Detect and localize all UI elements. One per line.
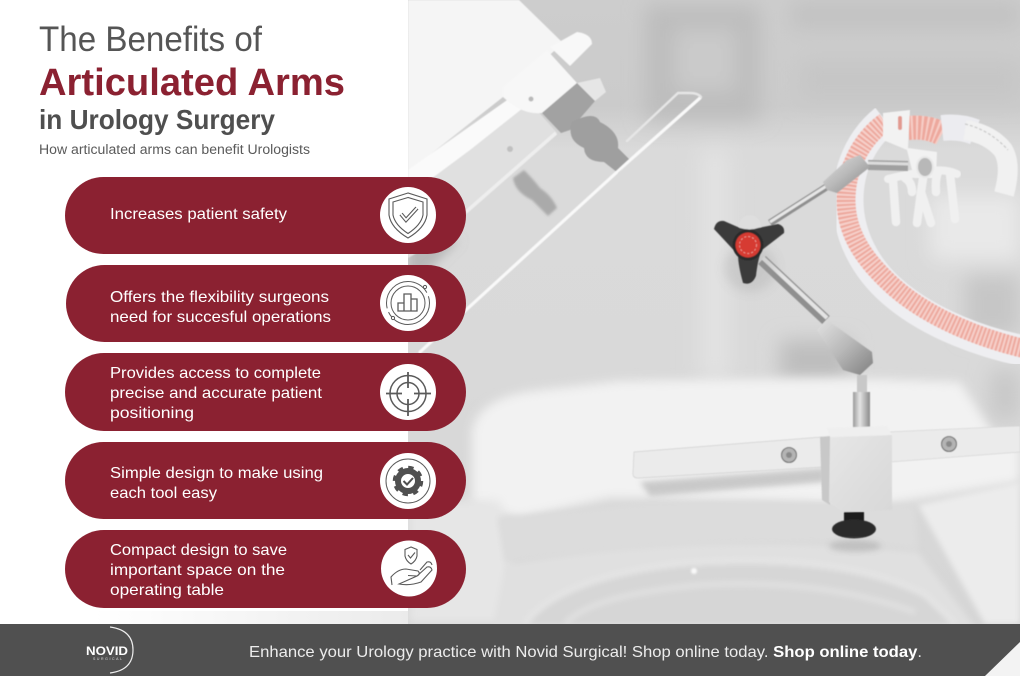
corner triangle <box>985 642 1020 676</box>
benefit pill: positioning: Provides access to complete <box>110 365 321 382</box>
benefit pill: compact design: Compact design to save <box>110 542 287 559</box>
benefit pill: simple design: Simple design to make using <box>110 465 323 482</box>
title <box>39 20 345 135</box>
white wire frame <box>420 93 701 352</box>
benefit pill: flexibility: need for succesful operations <box>110 309 331 326</box>
articulated arm <box>633 155 1020 552</box>
benefit pill: compact design <box>65 530 466 608</box>
benefit pill: positioning <box>65 353 466 431</box>
logo: Novid Surgical: SURGICAL <box>93 657 122 661</box>
bellows <box>570 116 630 173</box>
benefit pill: flexibility: Offers the flexibility surgeons <box>110 289 329 306</box>
benefit pill: simple design <box>65 442 466 519</box>
icon: gear check <box>380 453 436 509</box>
anesthesia machine body <box>408 0 630 290</box>
benefit pill: compact design: important space on the <box>110 562 285 579</box>
clamp bar <box>640 468 825 496</box>
call to action: Enhance your Urology practice with Novid Surgical! Shop online today. Shop online today . <box>249 644 922 661</box>
benefit pill: simple design: each tool easy <box>110 485 217 502</box>
operating table <box>408 484 1020 624</box>
icon: crosshair target <box>380 364 436 420</box>
footer bar <box>0 624 1020 676</box>
bottom-left faint fade <box>94 611 408 624</box>
benefit pill: flexibility <box>66 265 466 342</box>
three-lobed black knob <box>714 215 784 292</box>
background photo: operating room <box>408 0 1020 640</box>
benefit pill: positioning: positioning <box>110 405 194 422</box>
title: in Urology Surgery <box>39 104 275 135</box>
benefit pill: patient safety <box>65 177 466 254</box>
ventilator tube <box>846 120 1020 352</box>
benefit pill: patient safety: Increases patient safety <box>110 206 287 223</box>
icon: circular bar chart <box>380 275 436 331</box>
logo: Novid Surgical <box>86 627 133 673</box>
bed pillow and mattress <box>472 378 1020 518</box>
title: Articulated Arms <box>39 62 345 104</box>
icon: shield check <box>380 187 436 243</box>
tube holder clip <box>883 110 957 223</box>
logo: Novid Surgical: NOVID <box>86 646 128 658</box>
benefit pill: positioning: precise and accurate patient <box>110 385 323 402</box>
icon: hand holding shield <box>381 540 437 596</box>
benefit pill: compact design: operating table <box>110 582 224 599</box>
subtitle: How articulated arms can benefit Urologists <box>39 142 310 157</box>
left white panel <box>0 0 408 624</box>
title: The Benefits of <box>39 20 262 59</box>
